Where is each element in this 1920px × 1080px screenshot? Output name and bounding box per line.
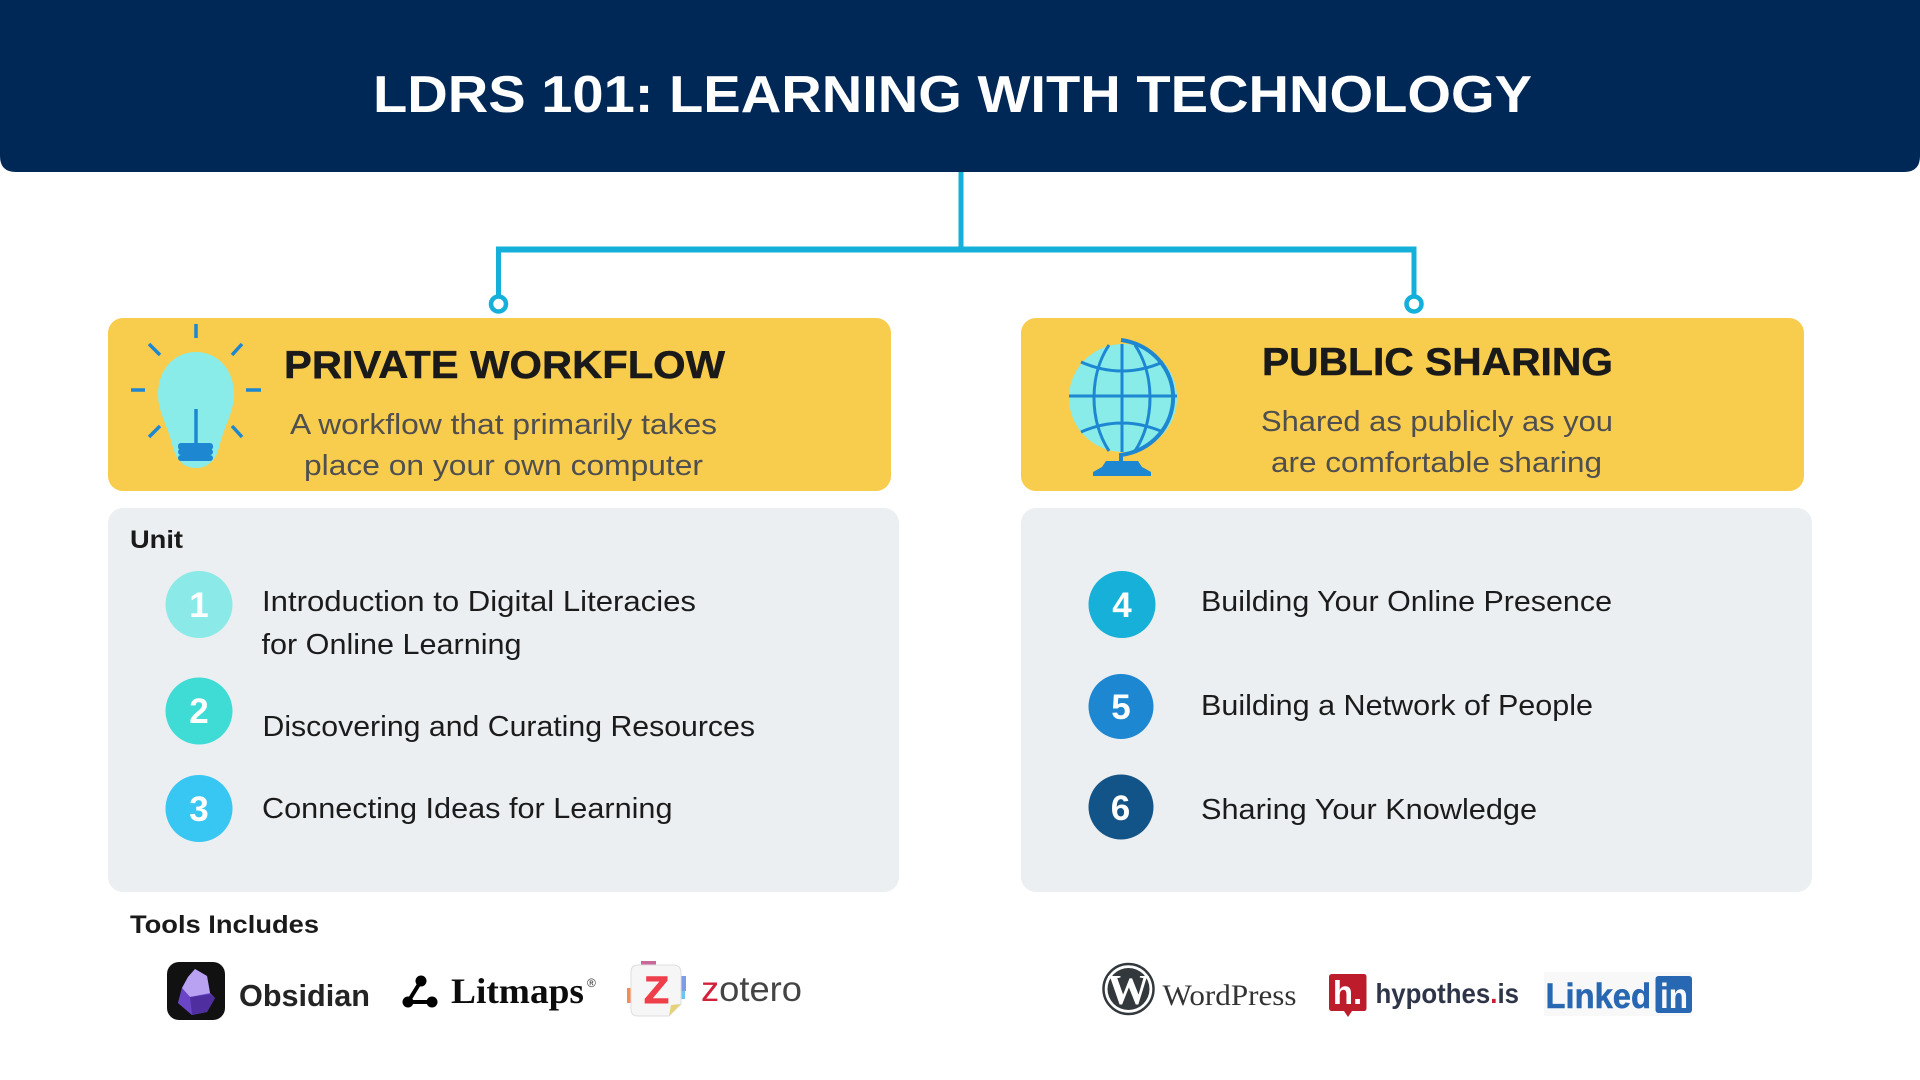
icon: light bulb [131,324,261,468]
logo: zotero: Z [644,970,669,1012]
logo: wordpress: W [1108,968,1150,1014]
logo: obsidian [167,962,370,1020]
description: private workflow: place on your own computer [304,450,703,482]
unit 1: Introduction to Digital Literacies [262,586,696,618]
title banner [0,0,1920,172]
logo: zotero: zotero [701,970,802,1009]
unit 3: Connecting Ideas for Learning [262,793,672,825]
logo: linkedin: Linked [1546,977,1651,1016]
heading: unit: Unit [130,526,184,554]
logo: hypothes.is: hypothes.is [1376,978,1519,1009]
panel: public sharing header [1021,318,1804,491]
logo: wordpress [1104,964,1296,1014]
description: public sharing: are comfortable sharing [1271,447,1602,479]
logo: wordpress: WordPress [1162,979,1296,1012]
description: public sharing [1261,406,1613,479]
unit 6: Sharing Your Knowledge [1201,794,1537,826]
panel: units 1 to 3 [108,508,899,892]
unit 1 [166,571,696,661]
unit 3: 3 [189,790,209,829]
logo: hypothes.is [1329,974,1519,1017]
heading: private workflow: PRIVATE WORKFLOW [284,344,725,387]
unit 1: for Online Learning [262,629,522,661]
logo: litmaps: ® [587,976,596,990]
logo: hypothes.is: h. [1333,974,1362,1011]
heading: public sharing: PUBLIC SHARING [1262,341,1613,384]
title: LDRS 101: LEARNING WITH TECHNOLOGY [373,66,1532,124]
unit 4: 4 [1112,586,1132,625]
heading: tools includes: Tools Includes [130,911,319,939]
unit 4 [1088,571,1612,638]
unit 3 [166,775,672,842]
panel: units 4 to 6 [1021,508,1812,892]
logo: litmaps: Litmaps [451,971,584,1011]
logo: linkedin: in [1660,977,1688,1016]
unit 4: Building Your Online Presence [1201,586,1612,618]
logo: zotero [627,961,802,1016]
description: public sharing: Shared as publicly as you [1261,406,1613,438]
logo: litmaps [402,971,596,1011]
logo: linkedin [1544,972,1692,1016]
unit 6: 6 [1111,789,1130,828]
unit 5: Building a Network of People [1201,690,1593,722]
unit 6 [1088,774,1537,840]
unit 2 [166,678,755,744]
unit 5: 5 [1111,688,1131,727]
panel: private workflow header [108,318,891,491]
description: private workflow: A workflow that primarily takes [290,409,717,441]
logo: obsidian: Obsidian [239,978,370,1013]
unit 1: 1 [189,586,209,625]
unit 5 [1088,674,1593,739]
unit 2: Discovering and Curating Resources [262,711,755,743]
icon: globe [1069,340,1177,476]
unit 2: 2 [189,692,209,731]
description: private workflow [290,409,717,482]
connector arrows [491,172,1422,312]
